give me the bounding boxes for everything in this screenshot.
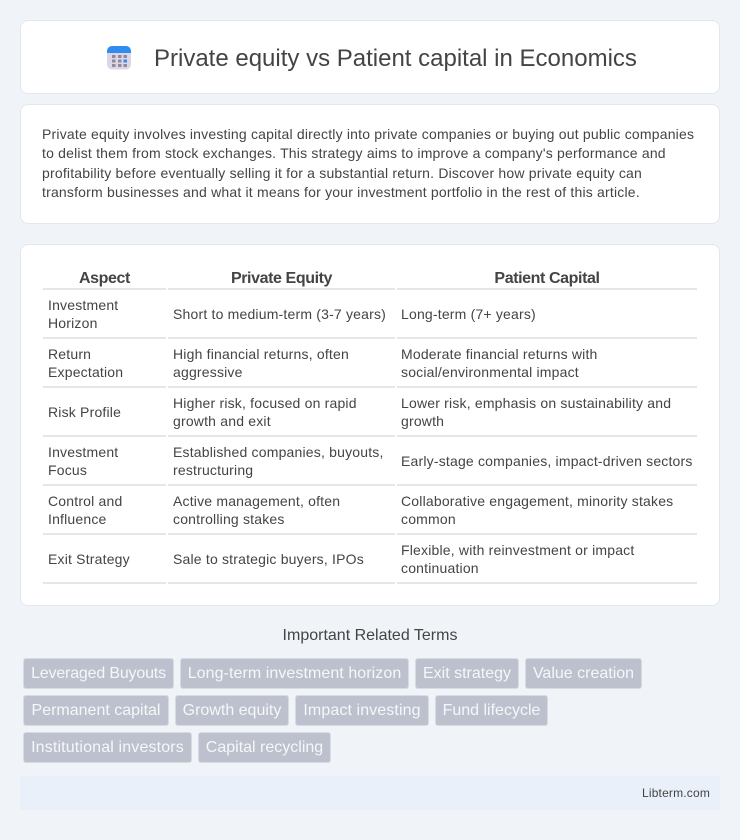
row: Control and Influence: controlling stakes bbox=[173, 511, 285, 527]
tag: Value creation bbox=[533, 665, 634, 682]
column headings bbox=[79, 270, 600, 287]
row: Investment Horizon: Long-term (7+ years) bbox=[401, 306, 536, 322]
row: Risk Profile: growth and exit bbox=[173, 413, 271, 429]
row: Control and Influence: common bbox=[401, 511, 456, 527]
row: Risk Profile: Risk Profile bbox=[48, 404, 121, 420]
panel: comparison table bbox=[20, 244, 720, 606]
tag: Exit strategy bbox=[423, 665, 511, 682]
title: Private equity vs Patient capital in Economics bbox=[154, 45, 637, 72]
tag bbox=[295, 695, 429, 726]
tag bbox=[23, 695, 169, 726]
comparison table bbox=[43, 270, 697, 584]
footer text: Libterm.com bbox=[642, 786, 710, 800]
row: Control and Influence: Influence bbox=[48, 511, 107, 527]
row: Investment Focus bbox=[48, 444, 693, 478]
column headings: Aspect bbox=[79, 270, 130, 287]
tag: Leveraged Buyouts bbox=[31, 665, 166, 682]
tag: Growth equity bbox=[183, 702, 281, 719]
row: Risk Profile: Higher risk, focused on rapid bbox=[173, 395, 357, 411]
footer bar bbox=[20, 776, 720, 810]
icon: calendar bbox=[107, 46, 131, 70]
row: Return Expectation: aggressive bbox=[173, 364, 243, 380]
tag: Long-term investment horizon bbox=[188, 665, 401, 682]
row: Control and Influence bbox=[48, 493, 673, 527]
tag: Permanent capital bbox=[32, 702, 160, 719]
tag bbox=[415, 658, 519, 689]
row: Control and Influence: Active management, often bbox=[173, 493, 340, 509]
row: Investment Focus: Early-stage companies, impact-driven sectors bbox=[401, 453, 693, 469]
row: Risk Profile: growth bbox=[401, 413, 444, 429]
tag: Impact investing bbox=[303, 702, 421, 719]
text block: introduction: profitability before eventually selling it for a substantial return. Discover how private equity can bbox=[42, 164, 642, 180]
row: Investment Horizon: Investment bbox=[48, 297, 118, 313]
row: Control and Influence: Collaborative engagement, minority stakes bbox=[401, 493, 673, 509]
tag: Fund lifecycle bbox=[443, 702, 540, 719]
row: Exit Strategy: Flexible, with reinvestment or impact bbox=[401, 542, 634, 558]
panel: title header bbox=[20, 20, 720, 94]
text block: introduction: transform businesses and what it means for your investment portfolio in the rest of this article. bbox=[42, 184, 640, 200]
text block: introduction: to delist them from stock exchanges. This strategy aims to improve a company's performance and bbox=[42, 145, 666, 161]
heading: Important Related Terms: Important Related Terms bbox=[283, 627, 457, 644]
text block: introduction bbox=[42, 126, 694, 200]
row: Return Expectation bbox=[48, 346, 598, 380]
row: Investment Horizon: Horizon bbox=[48, 315, 98, 331]
row: Investment Horizon: Short to medium-term (3-7 years) bbox=[173, 306, 386, 322]
row: Return Expectation: social/environmental impact bbox=[401, 364, 579, 380]
row: Exit Strategy: Sale to strategic buyers, IPOs bbox=[173, 551, 364, 567]
row: Control and Influence: Control and bbox=[48, 493, 122, 509]
tag: Institutional investors bbox=[31, 739, 184, 756]
tag: Capital recycling bbox=[206, 739, 323, 756]
row: Investment Focus: Established companies, buyouts, bbox=[173, 444, 384, 460]
row: Exit Strategy: Exit Strategy bbox=[48, 551, 130, 567]
tag bbox=[525, 658, 642, 689]
panel: introduction bbox=[20, 104, 720, 224]
tag bbox=[180, 658, 409, 689]
tag bbox=[198, 732, 331, 763]
row: Return Expectation: Expectation bbox=[48, 364, 123, 380]
row: Exit Strategy bbox=[48, 542, 634, 576]
column headings: Private Equity bbox=[231, 270, 332, 287]
tag bbox=[175, 695, 289, 726]
row: Investment Focus: restructuring bbox=[173, 462, 253, 478]
row: Investment Focus: Investment bbox=[48, 444, 118, 460]
row: Return Expectation: Moderate financial returns with bbox=[401, 346, 598, 362]
row: Return Expectation: Return bbox=[48, 346, 91, 362]
tag list: related terms bbox=[23, 658, 642, 763]
row: Risk Profile bbox=[48, 395, 671, 429]
tag bbox=[435, 695, 548, 726]
row: Exit Strategy: continuation bbox=[401, 560, 479, 576]
column headings: Patient Capital bbox=[494, 270, 600, 287]
row: Risk Profile: Lower risk, emphasis on sustainability and bbox=[401, 395, 671, 411]
row: Investment Horizon bbox=[48, 297, 536, 331]
tag bbox=[23, 658, 174, 689]
row: Return Expectation: High financial returns, often bbox=[173, 346, 349, 362]
tag bbox=[23, 732, 192, 763]
row: Investment Focus: Focus bbox=[48, 462, 87, 478]
text block: introduction: Private equity involves investing capital directly into private companies or buying out public companies bbox=[42, 126, 694, 142]
